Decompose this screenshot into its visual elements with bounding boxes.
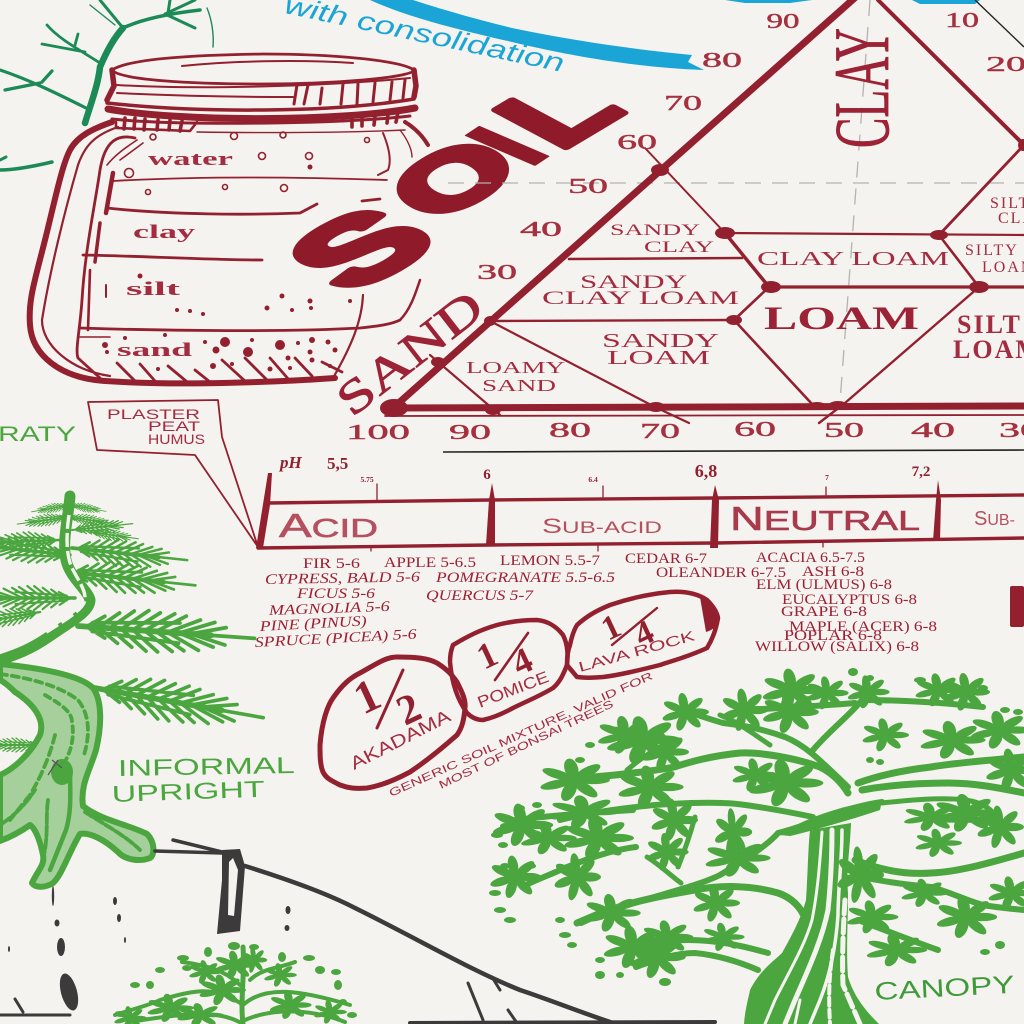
canopy leaf clusters [489,668,1024,979]
axis numbers left: 80 [702,48,742,72]
region: silty clay [990,195,1024,227]
soil mix pod: pomice: POMICE [475,669,551,712]
pH tick labels [278,453,930,484]
soil jar illustration [30,54,428,383]
pH tick labels: pH [278,453,302,472]
axis numbers left: 40 [520,217,562,241]
soil mix pod: lava rock: 4 [629,614,660,654]
blue consolidation band [370,0,980,70]
dark red edge marker [1010,586,1024,627]
pH scale bar [256,453,1024,551]
tree: small bottom canopy [113,942,357,1024]
grey dashed guides [448,0,1024,402]
callout: plaster peat humus: PLASTER [107,406,200,422]
soil mix pod: akadama [320,657,465,788]
axis numbers base: 80 [549,418,591,442]
region: silt loam [953,310,1024,364]
upper trunk [0,496,90,660]
callout: plaster peat humus: HUMUS [148,431,205,447]
soil mix caption [387,670,655,800]
region: clay loam: CLAY LOAM [757,248,949,270]
callout: plaster peat humus: PEAT [148,418,201,434]
species pH list: neutral: ASH 6-8 [802,564,864,580]
region: silt loam: SILT [957,310,1022,339]
soil mix pod: akadama: AKADAMA [347,706,454,774]
soil mix pod: akadama: 1 [346,668,388,724]
axis numbers base: 30 [999,418,1024,442]
tree: canopy [489,668,1024,1024]
thin black corner line [975,0,1024,47]
pH band: acid: A CID [279,507,378,544]
region: silty clay loam: SILTY [965,242,1019,259]
species pH list: sub-acid: QUERCUS 5-7 [426,588,534,604]
species pH list: sub-acid: POMEGRANATE 5.5-6.5 [435,570,615,586]
region: loamy sand: LOAMY [466,358,565,377]
mountain outline [0,840,715,1023]
bark dashes [0,674,140,870]
jar label: silt: silt [126,279,181,300]
species pH list: acid: MAGNOLIA 5-6 [267,599,391,619]
SOIL heading: L [467,62,650,164]
region: loamy sand [466,358,565,395]
species pH list: neutral: GRAPE 6-8 [781,604,867,620]
SOIL heading: S [255,189,466,308]
species pH list: neutral: WILLOW (SALIX) 6-8 [755,639,919,655]
triangle node dots [380,139,1024,417]
pH band: sub-alkaline: SUB- [974,508,1015,530]
tree branch top left [0,0,213,170]
canopy bark highlights [765,830,860,1024]
pH tick labels: 5,5 [327,454,348,473]
jar label: water: water [148,149,234,170]
species pH list: neutral: ACACIA 6.5-7.5 [756,550,865,566]
axis numbers left: 90 [766,9,800,33]
trunk knot [48,759,73,785]
jar label: clay: clay [133,222,196,243]
region: sandy clay: SANDY [610,222,701,239]
pH tick labels: 6.4 [588,475,598,484]
axis numbers base: 60 [734,417,776,441]
region: silty clay loam [965,242,1024,276]
black rule under triangle [443,450,1024,452]
jar bubbles and sand grains [102,132,370,372]
axis numbers base: 70 [640,419,680,443]
species pH list: neutral [625,550,937,655]
soil mix caption: GENERIC SOIL MIXTURE, VALID FOR [387,670,655,800]
region: loamy sand: SAND [482,376,556,395]
axis numbers base: 40 [911,418,955,442]
pH band: sub-acid: S UB-ACID [542,515,662,538]
jar neck threads [108,108,415,133]
axis numbers right: 20 [986,52,1024,76]
triangle frame and region lines [385,0,1024,423]
canopy trunk [744,823,879,1024]
canopy central limb [780,800,882,836]
species pH list: sub-acid [384,553,615,604]
corner label SAND: SAND [327,280,494,427]
species pH list: neutral: CEDAR 6-7 [625,551,707,567]
foliage sprays [0,501,267,752]
jar layer lines [80,178,400,382]
tree label: INFORMAL [118,752,295,781]
canopy label: CANOPY [874,971,1016,1006]
axis numbers base [346,417,1024,444]
species pH list: acid: SPRUCE (PICEA) 5-6 [254,626,418,651]
pH tick labels: 7 [825,473,829,482]
soil mix pod: pomice: 1 [470,633,504,677]
soil texture triangle [327,0,1024,444]
species pH list: acid: PINE (PINUS) [258,613,367,635]
soil mix pod: pomice [450,620,568,720]
species pH list: neutral: OLEANDER 6-7.5 [656,565,786,581]
tree: informal upright [0,496,295,887]
canopy branches [515,683,1024,970]
axis numbers left: 60 [617,130,657,154]
species pH list: neutral: POPLAR 6-8 [784,628,882,644]
soil mix pod: lava rock: LAVA ROCK [577,627,697,675]
pH tick labels: 6 [483,467,491,483]
SOIL heading: I [439,113,575,178]
region: loam: LOAM [764,301,919,337]
pH tick labels: 6,8 [695,461,717,481]
canopy scattered leaves [489,668,1023,986]
species pH list: acid: CYPRESS, BALD 5-6 [265,569,421,588]
jar label: sand: sand [117,340,193,361]
axis numbers left [477,9,800,284]
jar body outline [30,122,428,383]
region: sandy loam: LOAM [607,347,710,369]
axis numbers base: 90 [449,420,491,444]
soil mix pod: lava rock: 1 [596,608,627,648]
axis numbers base: 50 [824,418,864,442]
axis numbers base: 100 [346,420,410,444]
pH tick labels: 7,2 [912,464,930,480]
species pH list: sub-acid: LEMON 5.5-7 [500,553,600,569]
soil mix caption: MOST OF BONSAI TREES [437,698,616,792]
SOIL heading: O [363,122,543,235]
species pH list: acid: FIR 5-6 [303,556,360,572]
species pH list: neutral: EUCALYPTUS 6-8 [782,592,917,608]
region: sandy clay loam: SANDY [580,272,687,293]
axis numbers left: 30 [477,260,517,284]
lower trunk and roots [0,664,153,887]
species pH list: neutral: MAPLE (ACER) 6-8 [789,619,937,635]
tree label [111,752,295,807]
jar lid [107,54,416,110]
species pH list: neutral: ELM (ULMUS) 6-8 [756,577,892,593]
region: sandy clay loam: CLAY LOAM [542,288,739,309]
axis numbers left: 70 [664,91,702,115]
pH tick labels: 5.75 [360,475,374,484]
axis numbers right: 10 [945,8,979,32]
SOIL heading [255,62,650,308]
pH band: neutral: N EUTRAL [730,500,920,537]
axis numbers right [945,8,1024,76]
soil mix pod: lava rock [567,592,719,678]
region: sandy loam [602,330,719,369]
species pH list: acid: FICUS 5-6 [296,586,376,602]
species pH list: acid [254,556,421,651]
region: sandy loam: SANDY [602,330,719,352]
region: sandy clay: CLAY [644,239,715,256]
region: sandy clay loam [542,272,739,309]
soil mix pod: akadama: 2 [390,684,428,735]
soil mix pod: pomice: 4 [505,639,539,683]
species pH list: sub-acid: APPLE 5-6.5 [384,555,476,571]
region: sandy clay [610,222,715,256]
callout: plaster peat humus [88,400,258,547]
axis numbers left: 50 [568,174,608,198]
tree label: UPRIGHT [111,776,265,807]
